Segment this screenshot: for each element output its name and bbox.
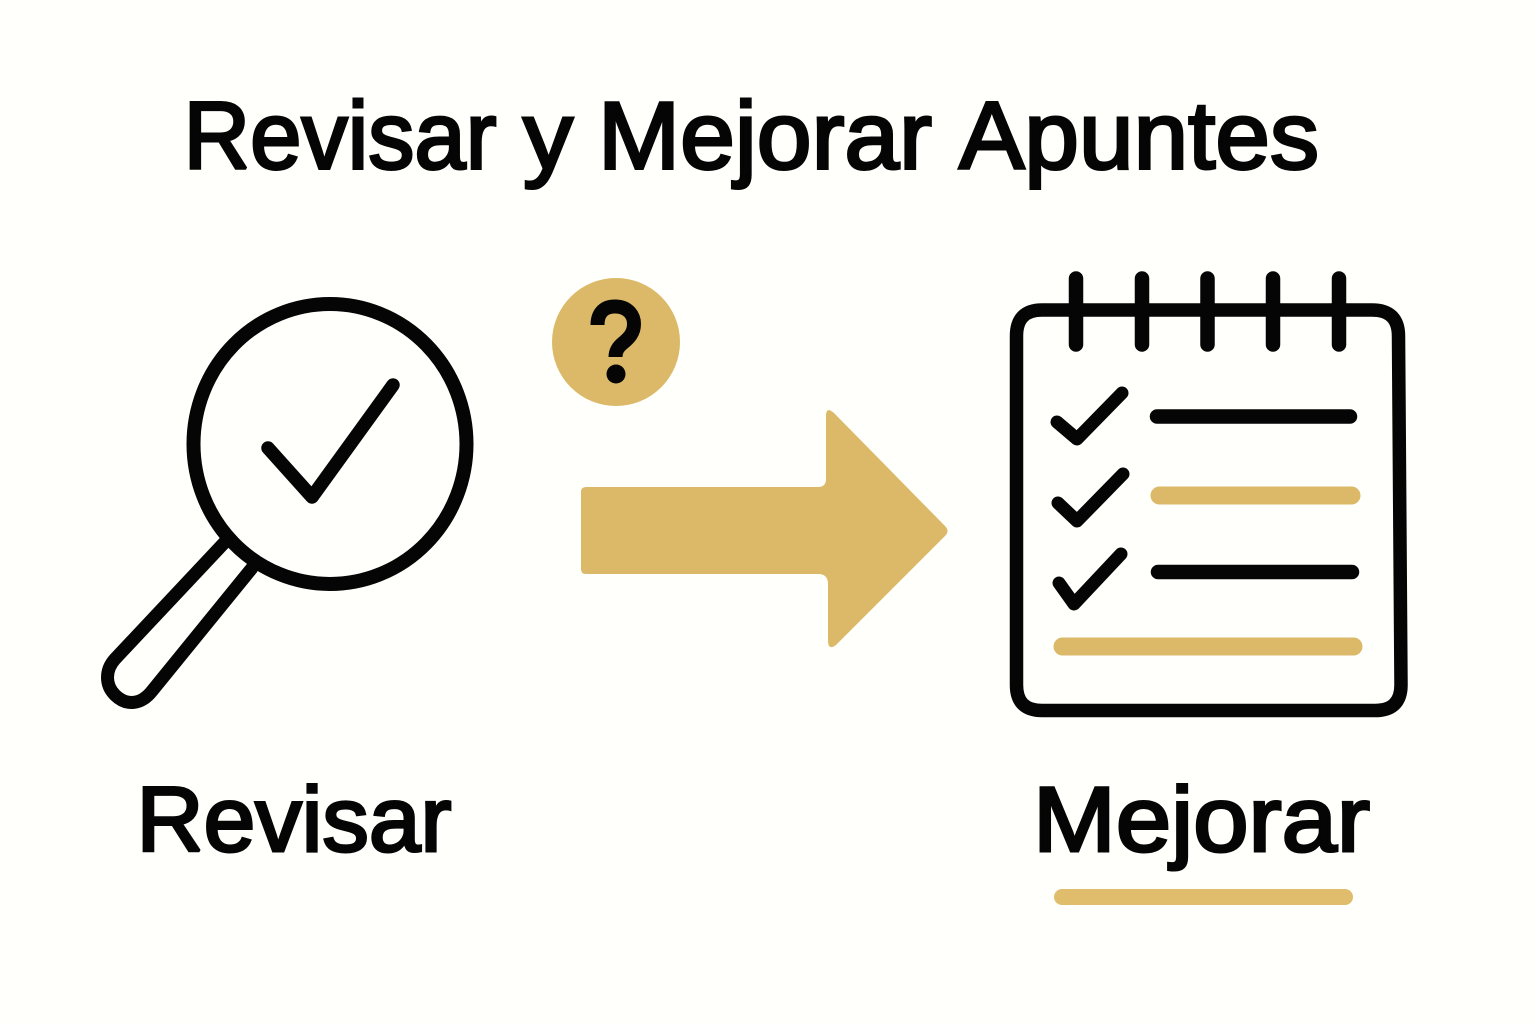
icon: notepad checklist [1016, 278, 1401, 710]
notepad body [1016, 310, 1401, 710]
icon: magnifying glass with check [108, 304, 466, 702]
list lines gold [1062, 496, 1354, 646]
checkmarks [1057, 393, 1123, 604]
underline: Mejorar [1062, 889, 1345, 905]
icon: question mark badge [552, 278, 680, 406]
arrow: revisar to mejorar [581, 410, 948, 647]
title: y [523, 82, 573, 190]
label: Mejorar: Mejorar [1033, 769, 1370, 871]
title: Revisar [184, 82, 496, 190]
title: Mejorar [598, 82, 932, 190]
label: Revisar: Revisar [136, 769, 452, 871]
spiral rings [1076, 278, 1339, 344]
title [184, 82, 1319, 190]
list lines black [1157, 416, 1352, 572]
title: Apuntes [959, 82, 1319, 190]
